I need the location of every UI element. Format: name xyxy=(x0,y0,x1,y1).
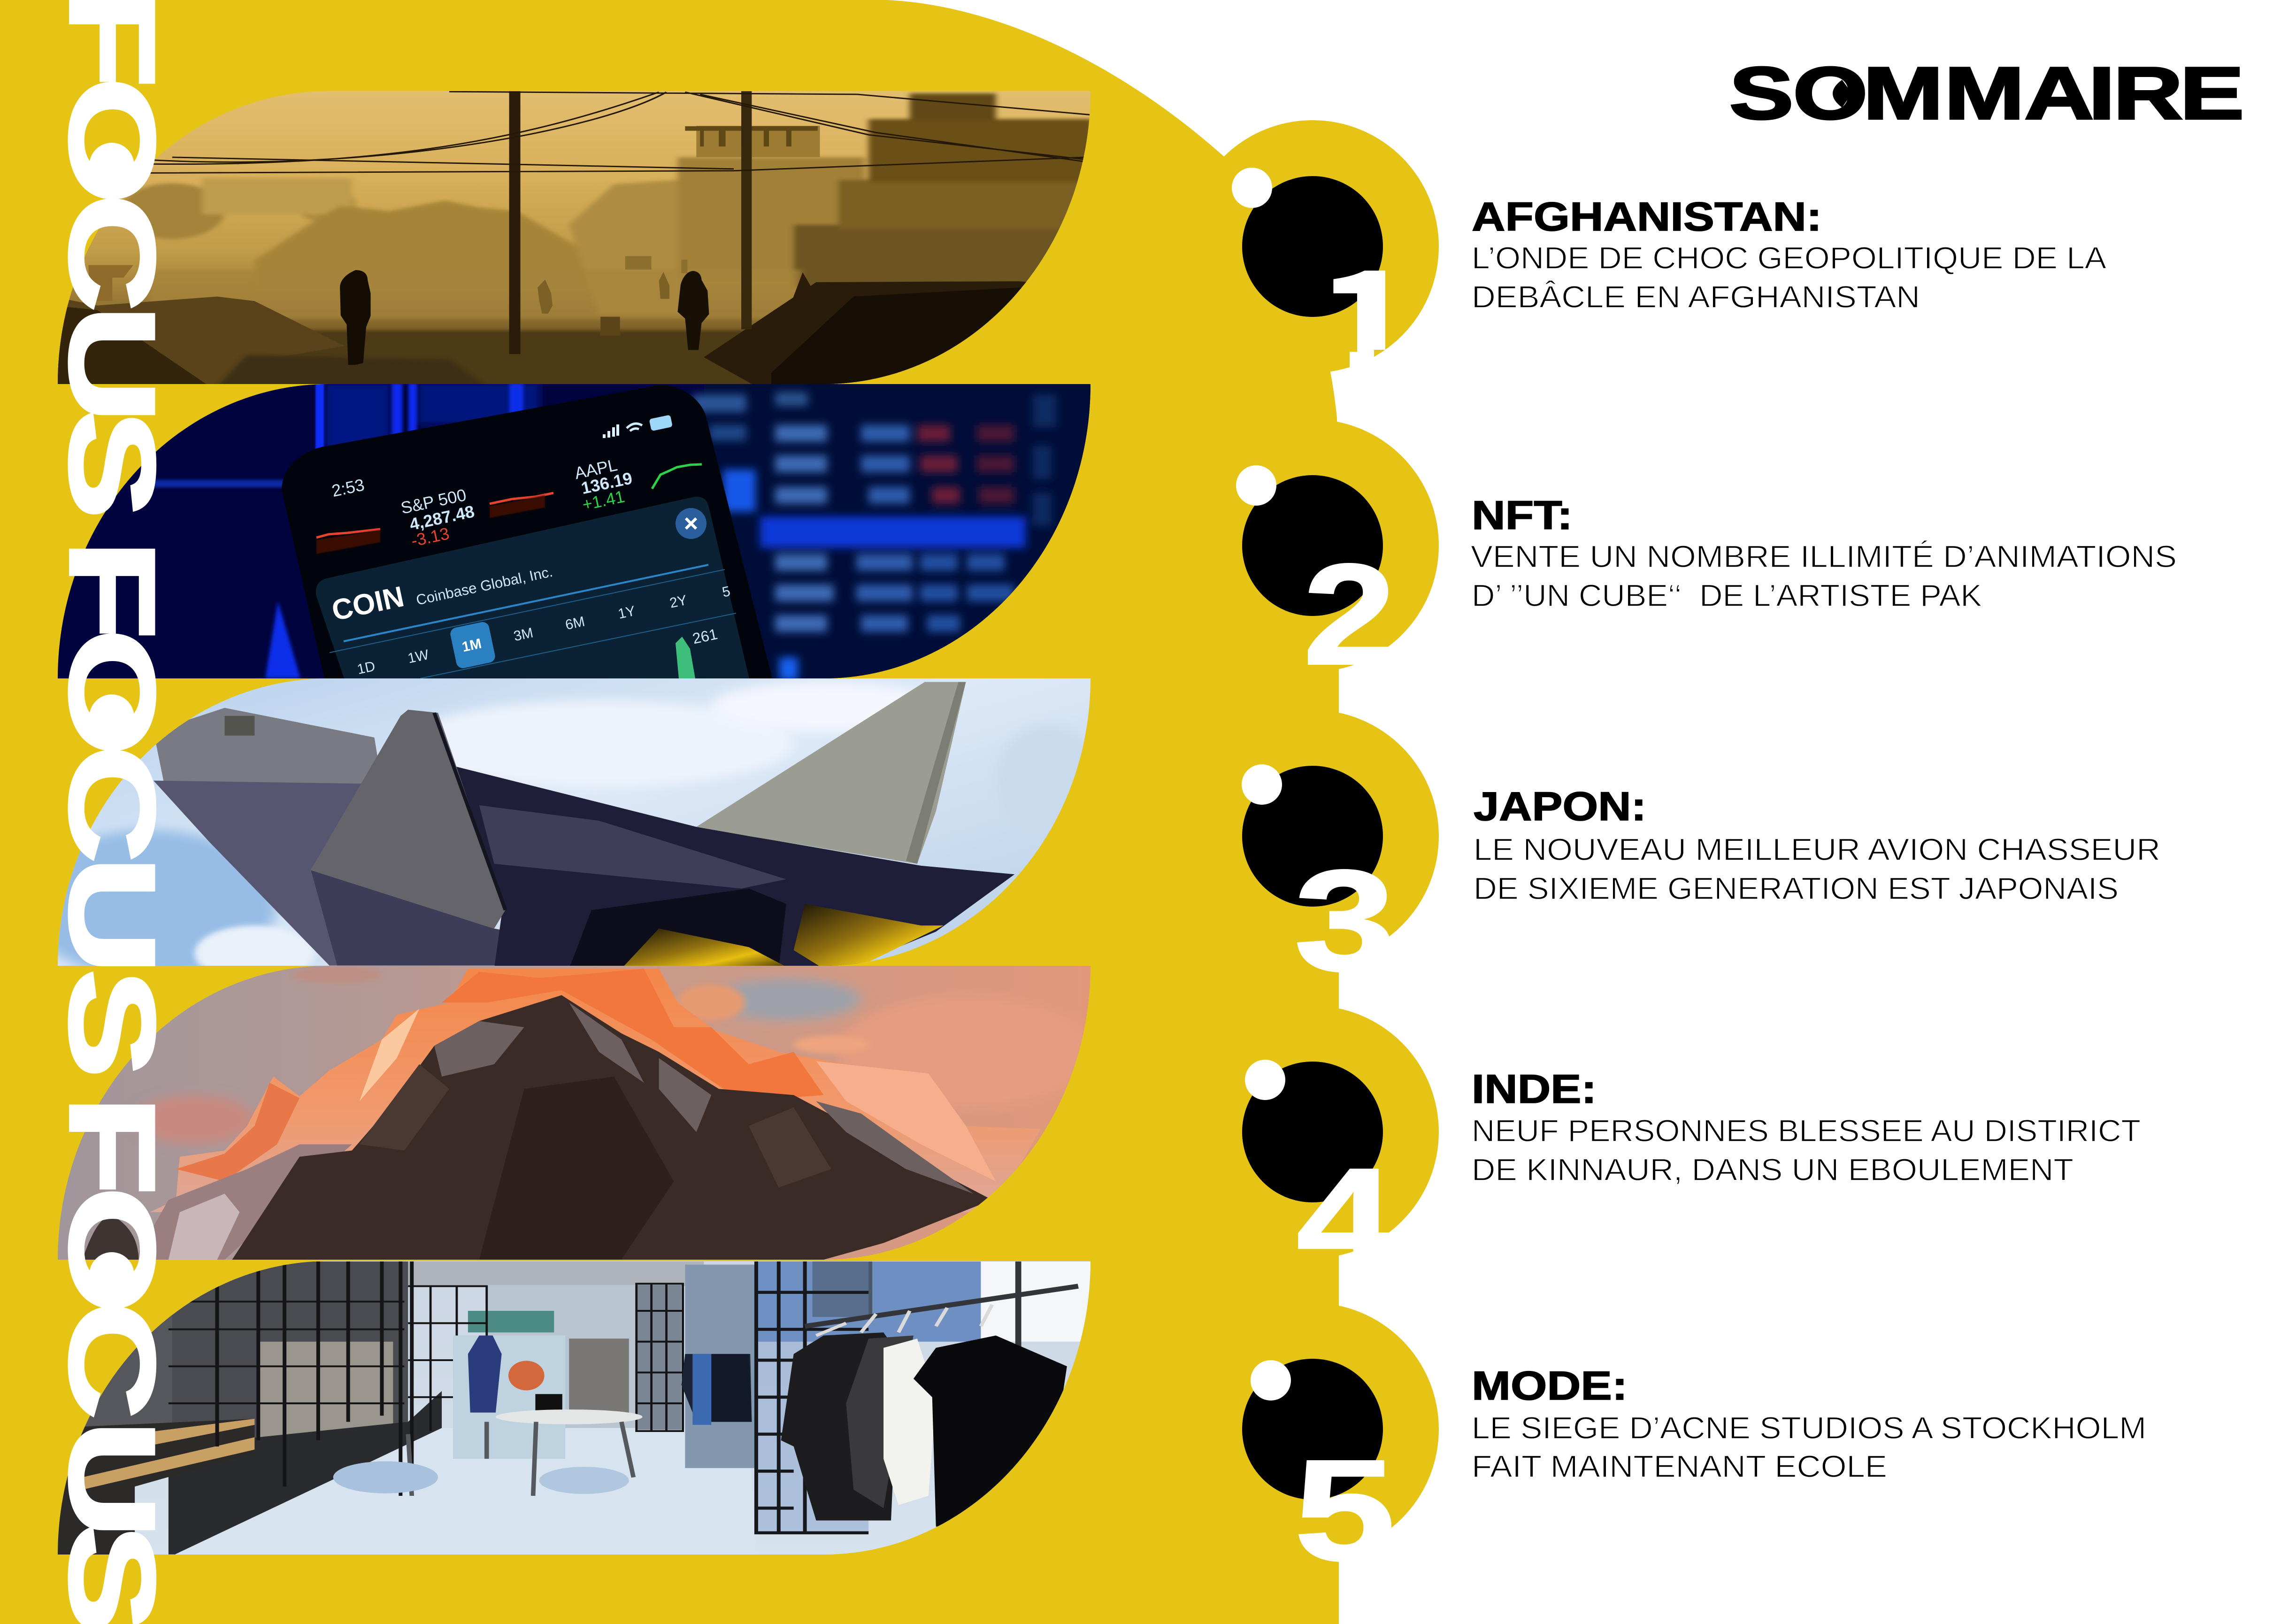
phone body xyxy=(282,385,772,678)
phone app text: 1Y xyxy=(617,603,637,622)
item 1 eye and number xyxy=(1232,168,1420,408)
selected period button xyxy=(449,621,496,670)
text block: Inde: NEUF PERSONNES BLESSEE AU DISTIRICT xyxy=(1472,1113,2141,1148)
mini charts xyxy=(316,464,702,554)
text block: Japon xyxy=(1474,784,2160,906)
phone app text: +1.41 xyxy=(581,486,626,514)
text block: Inde xyxy=(1472,1067,2141,1187)
phone app text xyxy=(329,455,732,677)
text block: Mode xyxy=(1472,1363,2146,1484)
text block: Afghanistan xyxy=(1472,194,2106,314)
item 5 eye and number xyxy=(1242,1359,1395,1590)
phone app text: COIN xyxy=(329,580,407,627)
phone app text: 1M xyxy=(461,636,483,655)
blurred market table xyxy=(692,392,1056,681)
text block: NFT: NFT: xyxy=(1472,493,1573,538)
item 1 eye and number: 1 xyxy=(1316,213,1420,408)
vertical word FOCUS: FOCUS xyxy=(45,1095,180,1624)
item 5 eye and number: 5 xyxy=(1294,1430,1395,1590)
text block: Mode: MODE: xyxy=(1472,1363,1628,1408)
phone app text: 6M xyxy=(564,614,586,633)
title SOMMAIRE: SOMMAIRE xyxy=(1729,52,2244,135)
item 4 eye and number: 4 xyxy=(1297,1139,1396,1299)
text block: Inde: DE KINNAUR, DANS UN EBOULEMENT xyxy=(1472,1152,2073,1187)
phone app text: AAPL xyxy=(573,455,619,483)
text block: Afghanistan: DEBÂCLE EN AFGHANISTAN xyxy=(1472,279,1920,314)
phone app text: 2:53 xyxy=(330,475,366,500)
photo: Japanese fighter jet xyxy=(23,676,1101,981)
text block: NFT: D’ ’’UN CUBE‘‘ DE L’ARTISTE PAK xyxy=(1472,578,1982,613)
text block: Mode: LE SIEGE D’ACNE STUDIOS A STOCKHOLM xyxy=(1472,1410,2146,1445)
photo: Acne Studios store interior xyxy=(52,1258,1098,1559)
close button xyxy=(676,508,706,539)
phone app text: 1D xyxy=(356,659,376,677)
text block: Japon: DE SIXIEME GENERATION EST JAPONAIS xyxy=(1474,871,2119,906)
phone app text: 261 xyxy=(691,625,719,647)
crescent inside title O xyxy=(1833,80,1852,108)
phone app text: S&P 500 xyxy=(399,485,468,518)
app card xyxy=(316,497,749,678)
phone app text: 2Y xyxy=(668,593,688,611)
item 2 eye and number xyxy=(1236,465,1396,694)
text block: Afghanistan: AFGHANISTAN: xyxy=(1472,194,1822,239)
phone app text: Coinbase Global, Inc. xyxy=(415,563,554,608)
phone app text: -3.13 xyxy=(409,523,451,550)
text block: Japon: LE NOUVEAU MEILLEUR AVION CHASSEUR xyxy=(1474,832,2160,867)
photo: Afghanistan misty street xyxy=(53,90,1108,389)
item 2 eye and number: 2 xyxy=(1303,534,1396,694)
text block: NFT: VENTE UN NOMBRE ILLIMITÉ D’ANIMATIONS xyxy=(1471,539,2177,574)
item 3 eye and number: 3 xyxy=(1294,840,1395,1001)
text block: Afghanistan: L’ONDE DE CHOC GEOPOLITIQUE DE LA xyxy=(1472,240,2106,275)
vertical word FOCUS xyxy=(45,0,180,1624)
vertical word FOCUS: FOCUS xyxy=(45,0,180,519)
white dots inside letter O xyxy=(89,143,134,1298)
item 4 eye and number xyxy=(1242,1060,1396,1299)
item 3 eye and number xyxy=(1242,764,1395,1001)
text block: NFT xyxy=(1471,493,2177,613)
phone app text: 136.19 xyxy=(579,468,634,498)
phone lines xyxy=(344,565,708,641)
text block: Japon: JAPON: xyxy=(1474,784,1646,829)
text block: Inde: INDE: xyxy=(1472,1067,1597,1112)
phone app text: 4,287.48 xyxy=(408,501,476,534)
phone app text: 3M xyxy=(512,625,535,644)
yellow background shape xyxy=(0,0,1439,1624)
text block: Mode: FAIT MAINTENANT ECOLE xyxy=(1472,1449,1887,1484)
photo: Himalayan mountain at sunset xyxy=(52,962,1098,1263)
phone app text: 1W xyxy=(407,647,430,667)
phone app text: 5 xyxy=(721,584,732,600)
status icons xyxy=(604,415,673,438)
vertical word FOCUS: FOCUS xyxy=(45,539,180,1078)
green spike xyxy=(676,637,695,678)
blue chart bars behind phone xyxy=(141,383,1098,683)
photo: stock app on smartphone xyxy=(52,380,1098,685)
